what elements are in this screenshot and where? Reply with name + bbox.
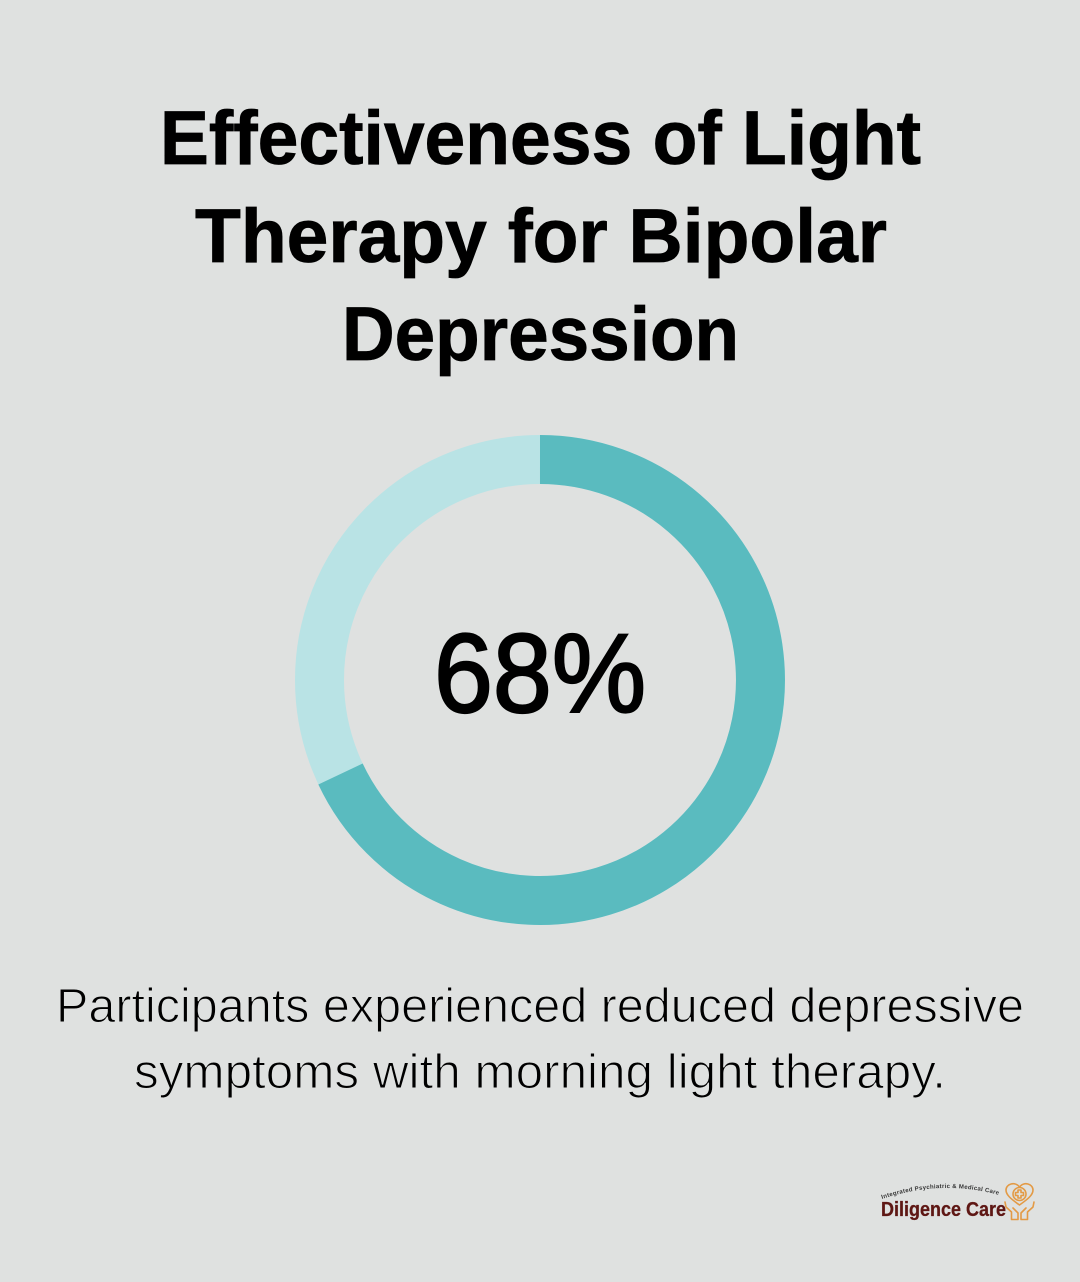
title <box>160 96 921 377</box>
title: Effectiveness of Light <box>160 96 921 181</box>
title: Depression <box>342 292 739 377</box>
donut chart: 68% <box>320 460 760 900</box>
description text: Participants experienced reduced depressive <box>56 980 1024 1033</box>
description text: symptoms with morning light therapy. <box>134 1046 946 1099</box>
donut value: 68% <box>434 611 646 736</box>
donut track: remaining 32% <box>320 460 760 900</box>
icon: heart with medical cross and hands <box>1005 1184 1034 1220</box>
donut segment: 68% <box>340 460 760 900</box>
description text <box>56 980 1024 1099</box>
logo: Diligence Care <box>881 1182 1035 1221</box>
logo wordmark: Diligence Care <box>881 1199 1006 1221</box>
title: Therapy for Bipolar <box>195 194 887 279</box>
logo tagline on arc: Integrated Psychiatric & Medical Care <box>881 1184 999 1199</box>
